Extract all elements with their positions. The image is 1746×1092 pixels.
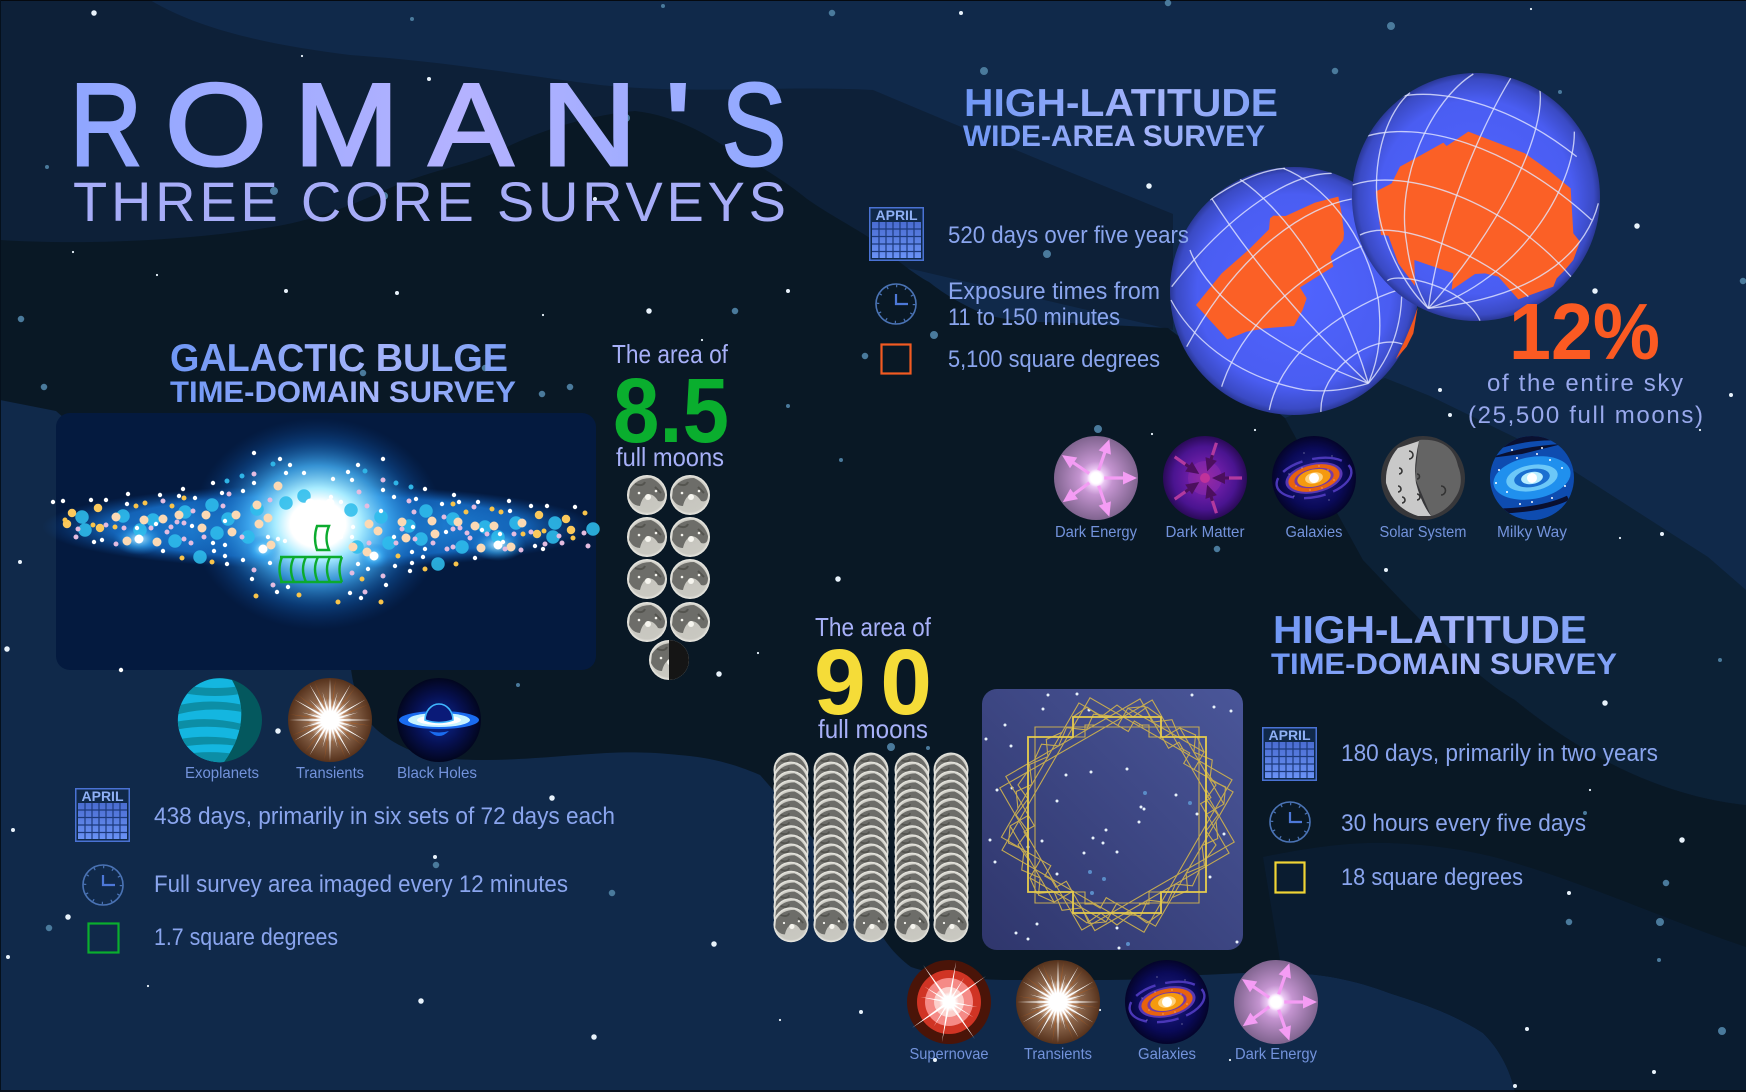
fact row: calendar, 520 days: APRIL xyxy=(876,207,918,223)
heading: time-domain survey: TIME-DOMAIN SURVEY xyxy=(1271,648,1617,681)
fact row: clock, exposure times: Exposure times from xyxy=(948,278,1160,305)
fact row: calendar, 180 days: 180 days, primarily in two years xyxy=(1341,740,1658,767)
icon: supernovae: Supernovae xyxy=(910,1046,989,1063)
fact row: clock, 30 hours: 30 hours every five days xyxy=(1341,810,1586,837)
section: high-latitude wide-area survey xyxy=(870,73,1703,541)
icon: galaxies xyxy=(1272,436,1356,541)
callout: area of 90 full moons: full moons xyxy=(818,714,928,744)
heading: wide-area survey: WIDE-AREA SURVEY xyxy=(963,120,1265,153)
panel: survey footprint on star field xyxy=(971,669,1263,961)
icon: exoplanets: Exoplanets xyxy=(185,765,259,782)
fact row: yellow square, 18 square degrees xyxy=(1276,862,1523,892)
callout: 12 percent of the sky: 12% xyxy=(1509,287,1660,376)
callout: area of 90 full moons: The area of xyxy=(815,612,932,642)
title line: Roman's: O xyxy=(165,59,267,190)
section: galactic bulge time-domain survey xyxy=(42,337,729,952)
icon: dark energy xyxy=(1234,960,1318,1063)
title line: Roman's: N xyxy=(541,59,637,190)
fact row: clock, 30 hours xyxy=(1270,802,1586,842)
heading: galactic bulge: TIME-DOMAIN SURVEY xyxy=(170,376,516,409)
icon: galaxies: Galaxies xyxy=(1286,524,1342,541)
icon: dark matter xyxy=(1163,436,1247,541)
section: high-latitude time-domain survey xyxy=(774,609,1658,1063)
fact row: green square, 1.7 square degrees: 1.7 square degrees xyxy=(154,924,338,951)
heading: time-domain survey xyxy=(1271,609,1617,681)
title line: Roman's: A xyxy=(429,59,513,190)
chart: two sky globes with survey footprint xyxy=(1170,73,1600,415)
fact row: clock, imaging cadence xyxy=(83,865,568,905)
title line: Roman's: R xyxy=(70,59,142,190)
heading: galactic bulge: GALACTIC BULGE xyxy=(170,337,508,380)
heading: wide-area survey xyxy=(963,82,1278,153)
fact row: yellow square, 18 square degrees: 18 square degrees xyxy=(1341,864,1523,891)
callout: area of 8.5 full moons: 8.5 xyxy=(613,360,729,462)
icon: exoplanets xyxy=(175,675,265,782)
heading: galactic bulge xyxy=(170,337,516,409)
globe: right hemisphere xyxy=(1352,73,1600,321)
icon: milky way xyxy=(1490,436,1574,541)
icon: transients xyxy=(284,674,376,782)
callout: 12 percent of the sky: (25,500 full moons) xyxy=(1468,402,1703,429)
icon: solar system xyxy=(1380,436,1466,541)
panel: milky way bulge illustration with survey footprint xyxy=(42,413,596,670)
icon: dark matter: Dark Matter xyxy=(1166,524,1245,541)
callout: area of 8.5 full moons: full moons xyxy=(616,442,724,472)
title line: Roman's xyxy=(70,59,786,190)
callout: area of 8.5 full moons: The area of xyxy=(612,339,729,369)
fact row: green square, 1.7 square degrees xyxy=(88,924,338,952)
fact row: calendar, 180 days: APRIL xyxy=(1268,727,1311,743)
icon: milky way: Milky Way xyxy=(1497,524,1567,541)
icon: supernovae xyxy=(907,956,991,1063)
moons: eight and a half xyxy=(627,475,710,680)
fact row: orange square, 5,100 square degrees xyxy=(882,344,1160,374)
fact row: calendar, 180 days xyxy=(1263,727,1658,780)
icon: galaxies: Galaxies xyxy=(1138,1046,1196,1063)
subtitle line: Three Core Surveys: THREE CORE SURVEYS xyxy=(73,170,786,233)
heading: wide-area survey: HIGH-LATITUDE xyxy=(964,82,1278,125)
icon: black holes xyxy=(397,678,481,782)
icon: transients: Transients xyxy=(1024,1046,1092,1063)
fact row: calendar, 438 days: 438 days, primarily in six sets of 72 days each xyxy=(154,803,615,830)
survey footprint outline xyxy=(280,526,342,582)
callout: 12 percent of the sky xyxy=(1468,287,1703,429)
globe: left hemisphere xyxy=(1170,167,1418,415)
fact row: orange square, 5,100 square degrees: 5,100 square degrees xyxy=(948,346,1160,373)
moons: five stacks of eighteen xyxy=(774,752,968,942)
icon: galaxies xyxy=(1125,960,1209,1063)
title xyxy=(70,59,786,233)
callout: 12 percent of the sky: of the entire sky xyxy=(1487,370,1683,397)
icon: solar system: Solar System xyxy=(1380,524,1466,541)
title line: Roman's: ' xyxy=(665,59,691,190)
fact row: clock, imaging cadence: Full survey area imaged every 12 minutes xyxy=(154,871,568,898)
icon: dark energy xyxy=(1054,436,1138,541)
fact row: clock, exposure times xyxy=(876,278,1160,331)
fact row: calendar, 438 days: APRIL xyxy=(82,788,124,804)
icon: transients xyxy=(1012,956,1104,1063)
icon: dark energy: Dark Energy xyxy=(1235,1046,1317,1063)
heading: time-domain survey: HIGH-LATITUDE xyxy=(1273,609,1587,652)
icon: dark energy: Dark Energy xyxy=(1055,524,1137,541)
fact row: calendar, 520 days xyxy=(870,207,1189,260)
icon: transients: Transients xyxy=(296,765,364,782)
fact row: calendar, 520 days: 520 days over five years xyxy=(948,222,1189,249)
icon: black holes: Black Holes xyxy=(397,765,477,782)
fact row: clock, exposure times: 11 to 150 minutes xyxy=(948,304,1120,331)
chart: yellow lattice of rotated detector tiles xyxy=(971,669,1263,961)
fact row: calendar, 438 days xyxy=(76,788,615,841)
title line: Roman's: S xyxy=(722,59,786,190)
title line: Roman's: M xyxy=(294,59,399,190)
callout: area of 90 full moons: 90 xyxy=(814,630,932,734)
